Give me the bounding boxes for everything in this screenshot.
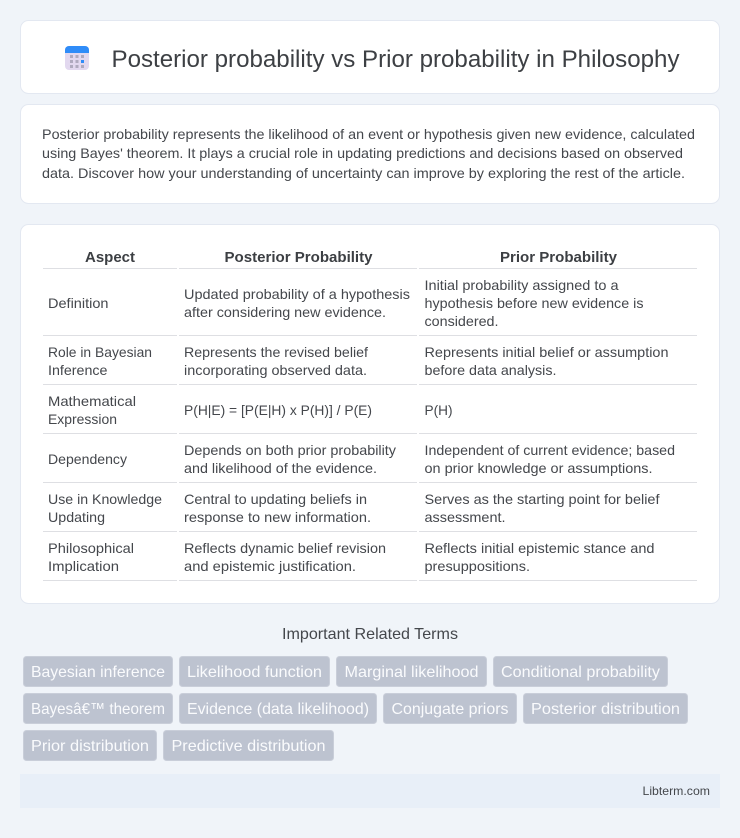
intro text: Posterior probability represents the likelihood of an event or hypothesis given new evidence, calculated — [42, 126, 695, 142]
tags: related terms: Bayesian inference — [31, 664, 165, 681]
row: mathematical expression: P(H|E) = [P(E|H) x P(H)] / P(E) — [184, 402, 372, 418]
row: philosophical implication: presuppositions. — [424, 558, 530, 574]
row: use in knowledge updating: Use in Knowledge — [48, 491, 162, 507]
header panel — [20, 20, 720, 94]
row: definition: Updated probability of a hypothesis — [184, 286, 410, 302]
row: definition — [48, 277, 644, 329]
tags: related terms: Conjugate priors — [392, 701, 508, 718]
intro text — [42, 126, 695, 181]
row: use in knowledge updating: Central to updating beliefs in — [184, 491, 367, 507]
row: dependency: Independent of current evidence; based — [424, 442, 675, 458]
row: philosophical implication — [48, 540, 654, 574]
row: use in knowledge updating: Updating — [48, 509, 105, 525]
tags: related terms: Bayesâ€™ theorem — [31, 701, 165, 718]
row: definition: hypothesis before new evidence is — [424, 295, 644, 311]
row: mathematical expression: Expression — [48, 411, 117, 427]
row: use in knowledge updating — [48, 491, 660, 525]
title: Posterior probability vs Prior probability in Philosophy — [112, 46, 680, 73]
table header: Aspect — [85, 249, 135, 266]
intro text: using Bayes' theorem. It plays a crucial role in updating predictions and decisions based on observed — [42, 145, 683, 161]
footer — [20, 774, 720, 808]
tags: related terms — [24, 656, 688, 760]
tags: related terms: Posterior distribution — [531, 701, 680, 718]
tags: related terms: Prior distribution — [31, 738, 149, 755]
tags: related terms: Predictive distribution — [172, 738, 326, 755]
table header: Prior Probability — [500, 249, 618, 266]
row: role in Bayesian inference: Represents initial belief or assumption — [424, 344, 668, 360]
panel: comparison table — [20, 224, 720, 604]
row: philosophical implication: Reflects dynamic belief revision — [184, 540, 386, 556]
row: role in Bayesian inference: before data analysis. — [424, 362, 556, 378]
row: philosophical implication: Philosophical — [48, 540, 134, 556]
row: role in Bayesian inference: Role in Bayesian — [48, 344, 152, 360]
tags: related terms: Evidence (data likelihood) — [187, 701, 369, 718]
row: role in Bayesian inference: Inference — [48, 362, 108, 378]
row: philosophical implication: Reflects initial epistemic stance and — [424, 540, 654, 556]
row: definition: Initial probability assigned to a — [424, 277, 619, 293]
icon: calendar — [65, 46, 89, 70]
row: dependency: and likelihood of the evidence. — [184, 460, 377, 476]
row: dependency — [48, 442, 675, 476]
row: role in Bayesian inference: incorporating observed data. — [184, 362, 367, 378]
panel: intro — [20, 104, 720, 204]
tags: related terms: Marginal likelihood — [344, 664, 478, 681]
footer: Libterm.com — [642, 784, 710, 798]
row: mathematical expression: P(H) — [424, 402, 452, 418]
tags: related terms: Conditional probability — [501, 664, 660, 681]
row: use in knowledge updating: assessment. — [424, 509, 506, 525]
row: philosophical implication: and epistemic justification. — [184, 558, 356, 574]
row: definition: considered. — [424, 313, 498, 329]
row: use in knowledge updating: response to new information. — [184, 509, 371, 525]
row: mathematical expression — [48, 393, 452, 427]
row: dependency: on prior knowledge or assumptions. — [424, 460, 652, 476]
intro text: data. Discover how your understanding of uncertainty can improve by exploring the rest of the article. — [42, 165, 685, 181]
row: definition: Definition — [48, 295, 108, 311]
table header — [85, 249, 618, 266]
row: use in knowledge updating: Serves as the starting point for belief — [424, 491, 660, 507]
row: philosophical implication: Implication — [48, 558, 119, 574]
row: role in Bayesian inference: Represents the revised belief — [184, 344, 368, 360]
row: mathematical expression: Mathematical — [48, 393, 136, 409]
row: dependency: Depends on both prior probability — [184, 442, 396, 458]
tags: related terms: Likelihood function — [187, 664, 322, 681]
row: dependency: Dependency — [48, 451, 127, 467]
table header: Posterior Probability — [224, 249, 373, 266]
heading: related terms: Important Related Terms — [282, 626, 458, 643]
row: role in Bayesian inference — [48, 344, 668, 378]
row: definition: after considering new evidence. — [184, 304, 386, 320]
